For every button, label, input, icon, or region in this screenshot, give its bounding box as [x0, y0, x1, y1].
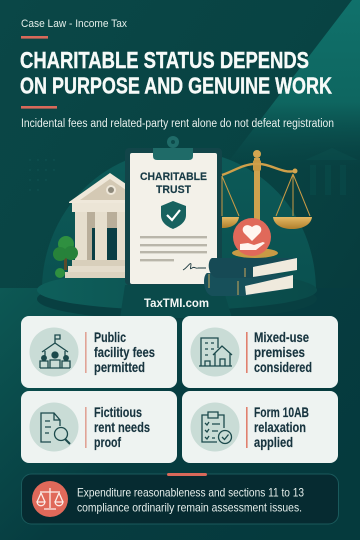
icon: courthouse: [65, 173, 126, 278]
card text: facility fees: [94, 345, 155, 360]
card: fictitious rent: [21, 391, 177, 463]
card text: proof: [94, 435, 121, 450]
icon: heart in hand: [233, 218, 271, 256]
icon: document with magnifier: [30, 402, 78, 452]
clipboard: [125, 136, 222, 285]
clipboard heading: TRUST: [156, 184, 191, 196]
hero illustration: [37, 136, 317, 320]
clipboard heading: [140, 171, 207, 196]
faint background building: [305, 148, 358, 195]
callout text: [77, 486, 304, 514]
icon: books: [204, 258, 297, 296]
card: mixed-use premises: [182, 316, 338, 388]
subtitle: Incidental fees and related-party rent alone do not defeat registration: [21, 118, 334, 130]
card text: [254, 405, 309, 450]
card text: applied: [254, 435, 293, 450]
eyebrow: Case Law - Income Tax: [21, 18, 127, 30]
card text: premises: [254, 345, 305, 360]
clipboard heading: CHARITABLE: [140, 171, 207, 183]
icon: scales: [222, 150, 312, 258]
icon: shield: [161, 201, 186, 229]
card text: relaxation: [254, 420, 306, 435]
icon: tree: [53, 236, 78, 278]
card text: [254, 330, 312, 375]
card text: Form 10AB: [254, 405, 309, 420]
card text: Fictitious: [94, 405, 142, 420]
card text: [94, 330, 155, 375]
card: form 10AB: [182, 391, 338, 463]
card text: rent needs: [94, 420, 150, 435]
title: [20, 47, 332, 98]
callout text: Expenditure reasonableness and sections 11 to 13: [77, 486, 304, 500]
card text: Public: [94, 330, 126, 345]
callout: [22, 473, 338, 524]
background dot pattern left: [29, 159, 55, 191]
icon: scales badge: [32, 481, 68, 517]
card text: [94, 405, 150, 450]
icon: building and house: [190, 328, 240, 376]
icon: school: [30, 328, 78, 376]
card: public facility fees: [21, 316, 177, 388]
icon: checklist: [190, 402, 240, 452]
card text: considered: [254, 360, 312, 375]
card text: permitted: [94, 360, 145, 375]
card text: Mixed-use: [254, 330, 309, 345]
callout text: compliance ordinarily remain assessment issues.: [77, 500, 302, 514]
site label: TaxTMI.com: [144, 296, 209, 310]
